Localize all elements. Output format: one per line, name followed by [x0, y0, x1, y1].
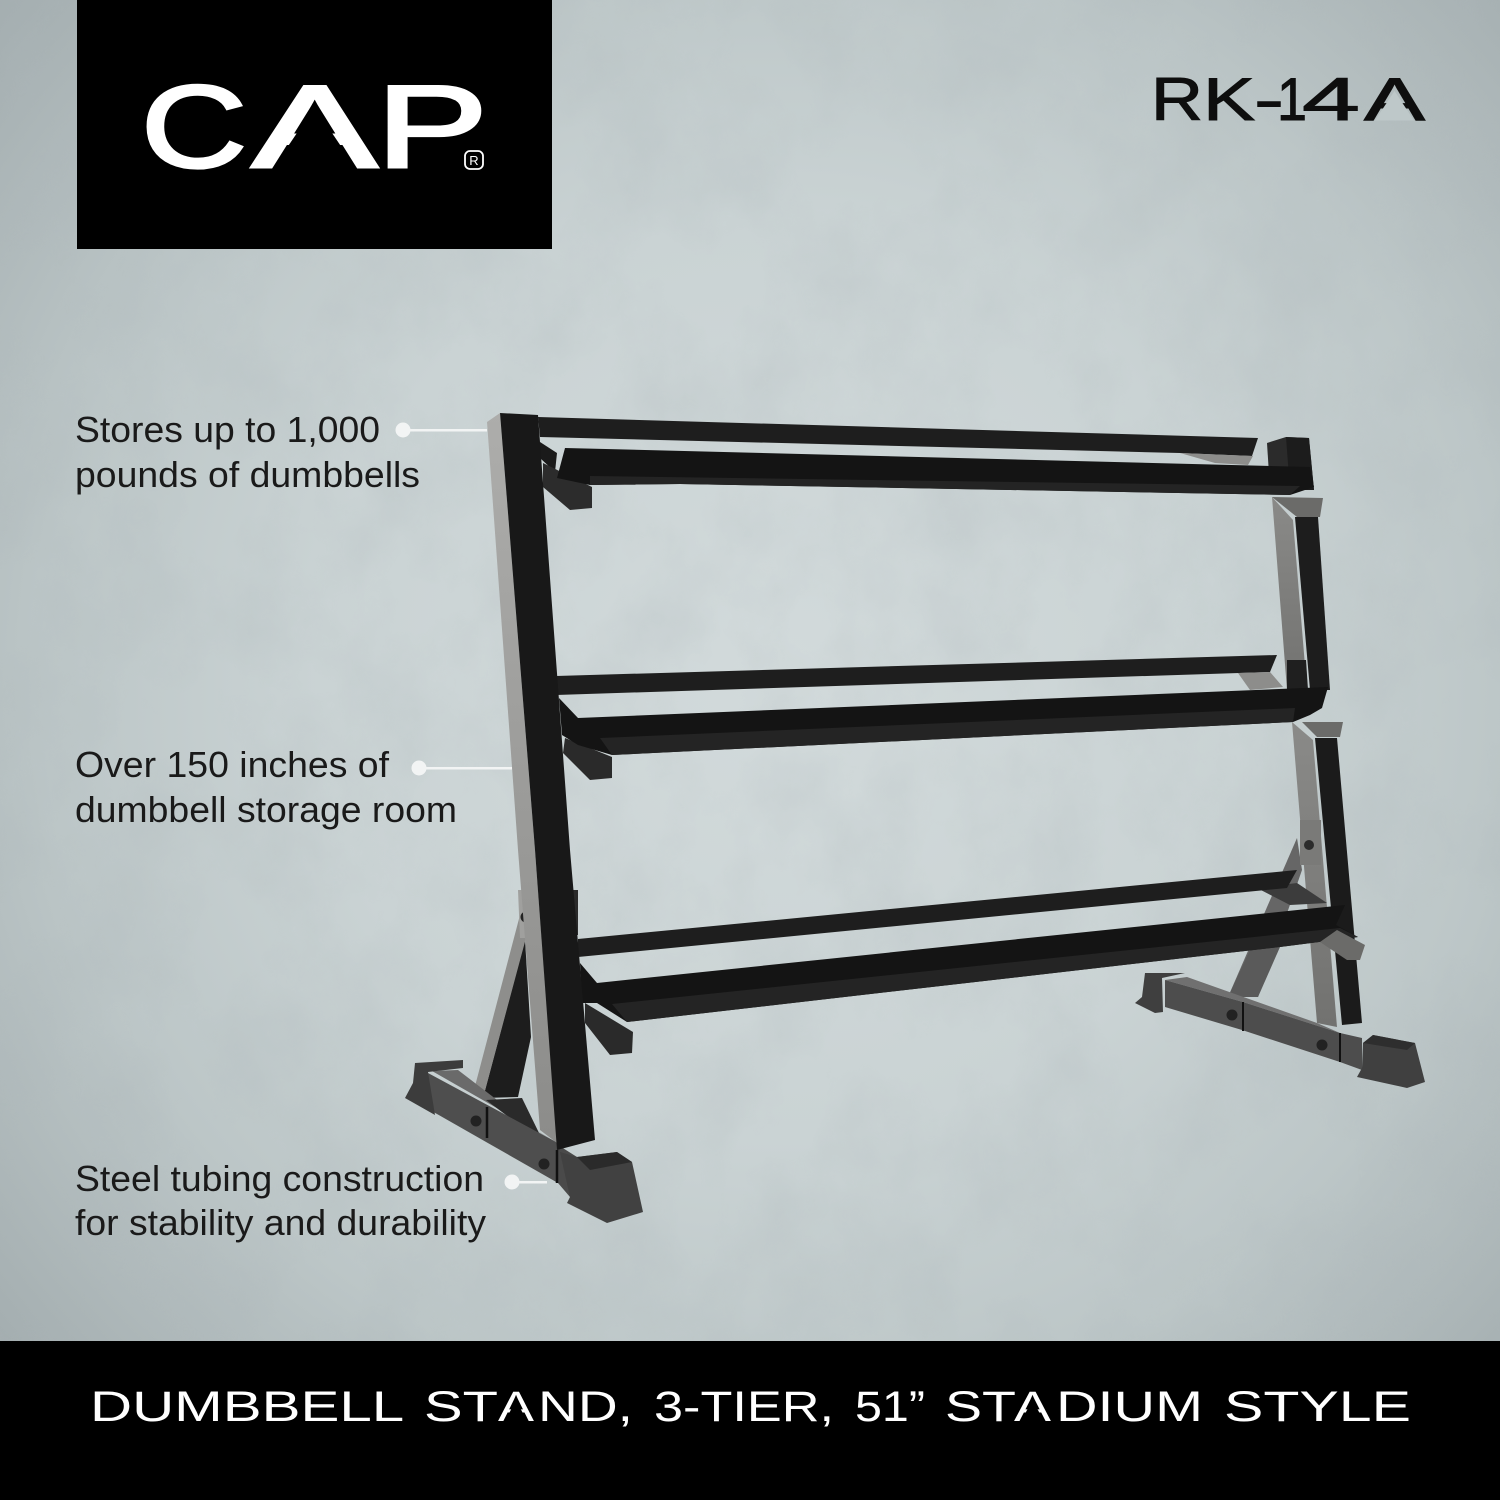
callout: storage capacity: pounds of dumbbells: [75, 454, 420, 495]
product title: ND,: [538, 1383, 633, 1431]
callout: storage room: Over 150 inches of: [75, 744, 390, 785]
callout: storage room: dumbbell storage room: [75, 789, 457, 830]
registered mark: [465, 151, 483, 169]
leader line: [412, 760, 512, 776]
model number: A: [1364, 66, 1425, 133]
model number: 4: [1302, 66, 1360, 133]
callout: construction: [75, 1158, 547, 1243]
callout: construction: for stability and durability: [75, 1202, 486, 1243]
rack: left upright: [487, 413, 595, 1150]
product title: [90, 1383, 1411, 1431]
logo wordmark: C: [141, 61, 247, 192]
brand logo panel: [77, 0, 552, 249]
product title: A: [1014, 1383, 1051, 1431]
callout: storage room: [75, 744, 512, 830]
leader line: [396, 422, 487, 438]
rack: right brace: [1228, 820, 1327, 997]
product title: STYLE: [1224, 1383, 1411, 1431]
logo wordmark: A: [252, 61, 377, 192]
callout: storage capacity: [75, 409, 487, 495]
product title: ST: [945, 1383, 1016, 1431]
rack: left foot: [405, 1060, 643, 1223]
rack: middle tier: [556, 655, 1343, 780]
model number: [1151, 66, 1425, 133]
dumbbell rack: [405, 413, 1425, 1223]
model number: R: [1151, 66, 1203, 133]
rack: left brace: [474, 890, 578, 1098]
footer band: [0, 1341, 1500, 1500]
product title: DIUM: [1056, 1383, 1203, 1431]
model number: 1: [1277, 66, 1307, 133]
logo wordmark: P: [376, 61, 488, 192]
product title: A: [498, 1383, 534, 1431]
model number: -: [1254, 66, 1284, 133]
product title: ST: [424, 1383, 498, 1431]
rack: right upright: [1267, 437, 1362, 1027]
callout: construction: Steel tubing construction: [75, 1158, 484, 1199]
rack: bottom tier: [578, 870, 1365, 1055]
model number: K: [1203, 66, 1255, 133]
product title: 3-TIER,: [654, 1383, 834, 1431]
rack: right foot: [1135, 973, 1425, 1088]
callout: storage capacity: Stores up to 1,000: [75, 409, 380, 450]
product title: 51”: [855, 1383, 925, 1431]
registered mark: R: [469, 153, 479, 168]
leader line: [504, 1174, 547, 1190]
product title: DUMBBELL: [90, 1383, 403, 1431]
rack: top tier: [538, 417, 1323, 517]
